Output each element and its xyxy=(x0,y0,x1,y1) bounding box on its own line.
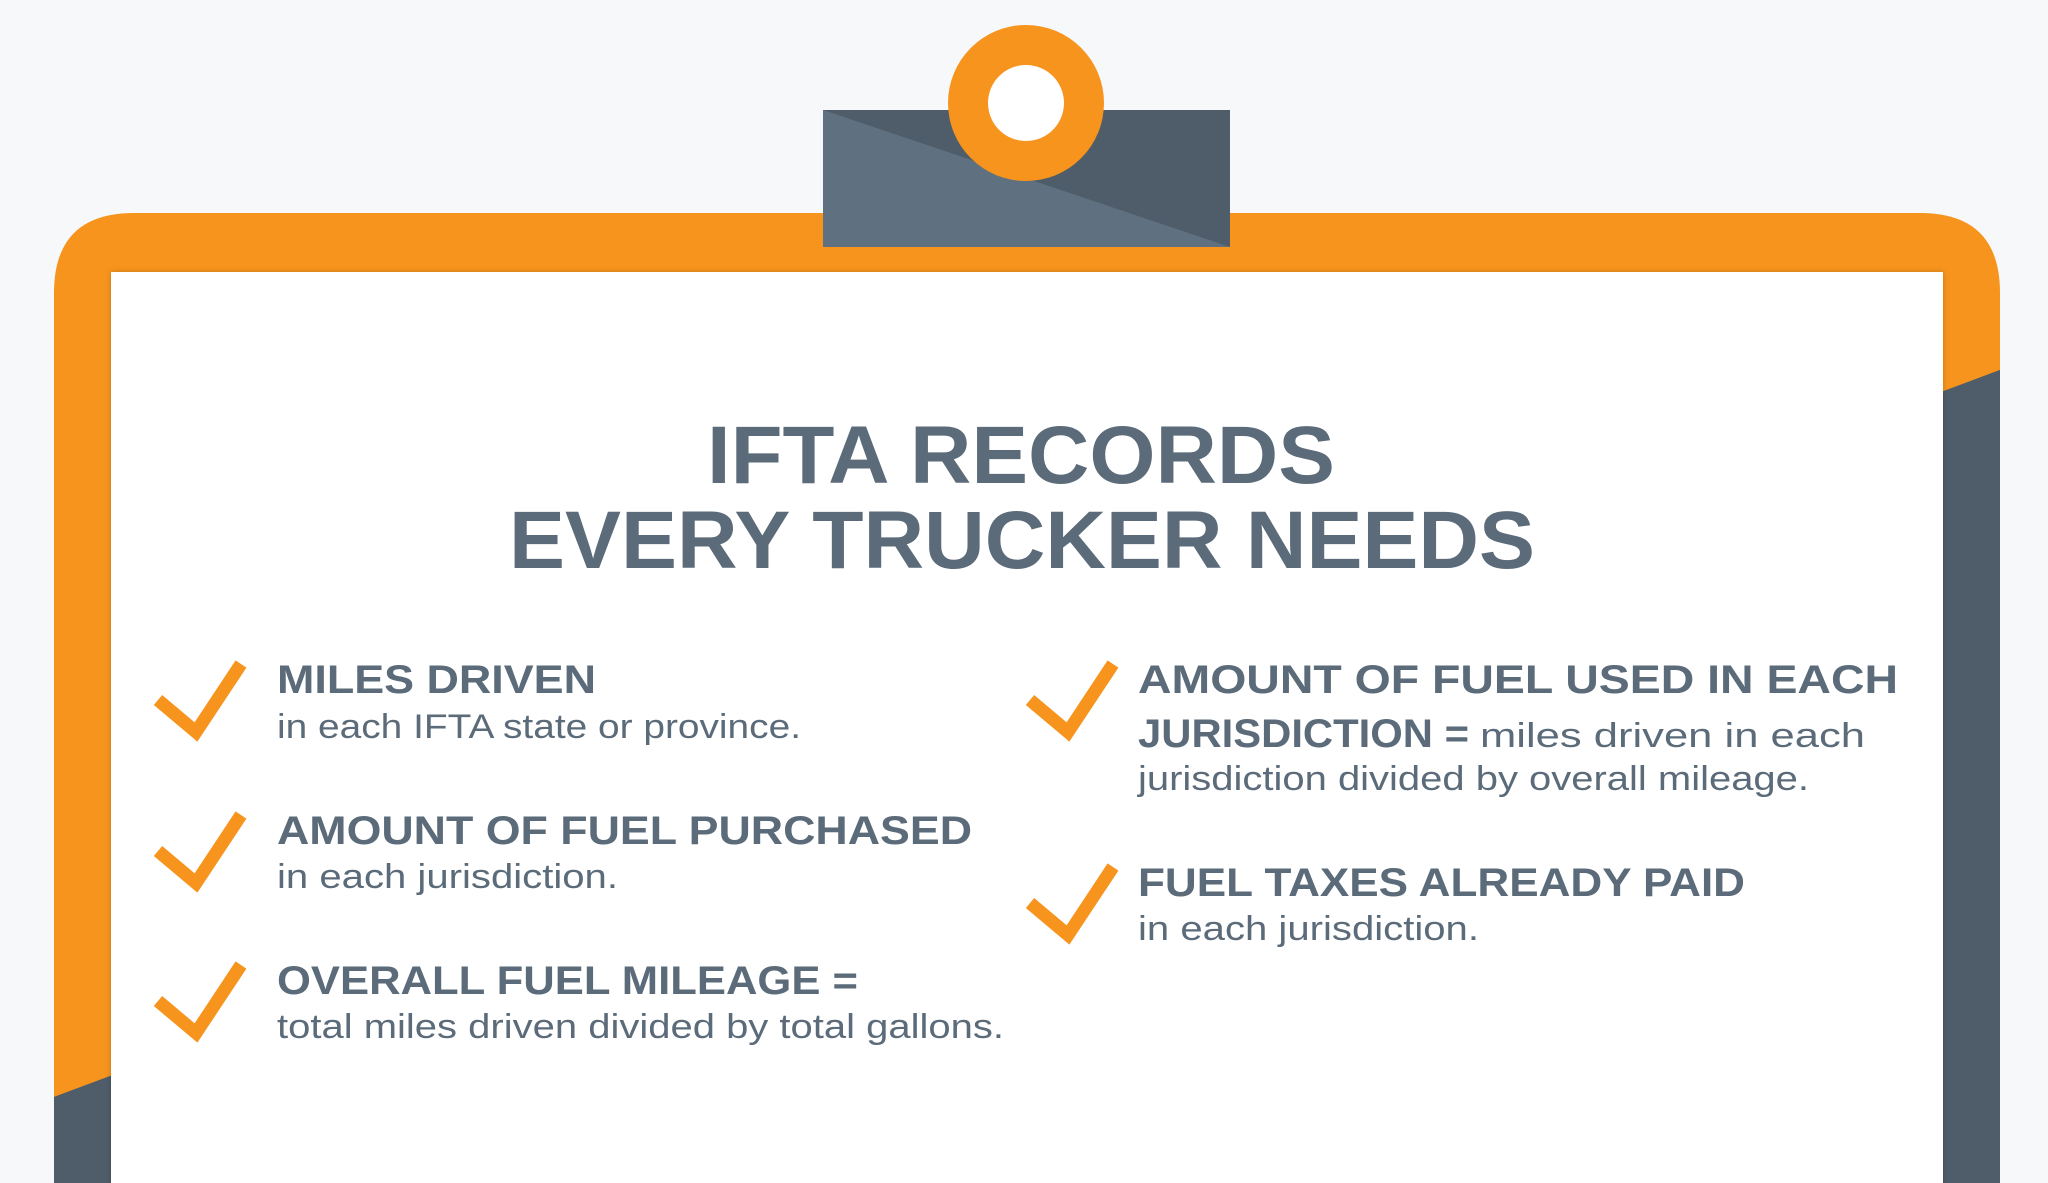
item: fuel used per jurisdiction: AMOUNT OF FUEL USED IN EACH xyxy=(1138,658,1898,702)
item: overall fuel mileage: OVERALL FUEL MILEAGE = xyxy=(277,959,858,1003)
title xyxy=(509,410,1535,586)
title: EVERY TRUCKER NEEDS xyxy=(509,495,1535,586)
item: fuel taxes paid xyxy=(1030,861,1745,948)
item: fuel taxes paid: FUEL TAXES ALREADY PAID xyxy=(1138,861,1745,905)
item: miles driven xyxy=(158,658,801,746)
item: fuel used per jurisdiction xyxy=(1030,658,1898,798)
item: fuel purchased: AMOUNT OF FUEL PURCHASED xyxy=(277,809,972,853)
item: overall fuel mileage xyxy=(158,959,1004,1046)
item: fuel used per jurisdiction: jurisdiction divided by overall mileage. xyxy=(1137,760,1809,798)
item: miles driven: in each IFTA state or province. xyxy=(277,708,801,746)
item: fuel purchased xyxy=(158,809,972,896)
item: fuel used per jurisdiction: JURISDICTION = xyxy=(1138,712,1469,756)
item: fuel used per jurisdiction: miles driven in each xyxy=(1480,717,1865,755)
white board xyxy=(111,272,1943,1183)
item: fuel purchased: in each jurisdiction. xyxy=(277,858,618,896)
item: miles driven: MILES DRIVEN xyxy=(277,658,596,702)
clip xyxy=(823,25,1230,247)
title: IFTA RECORDS xyxy=(707,410,1335,501)
item: fuel taxes paid: in each jurisdiction. xyxy=(1138,910,1479,948)
item: overall fuel mileage: total miles driven divided by total gallons. xyxy=(277,1008,1004,1046)
